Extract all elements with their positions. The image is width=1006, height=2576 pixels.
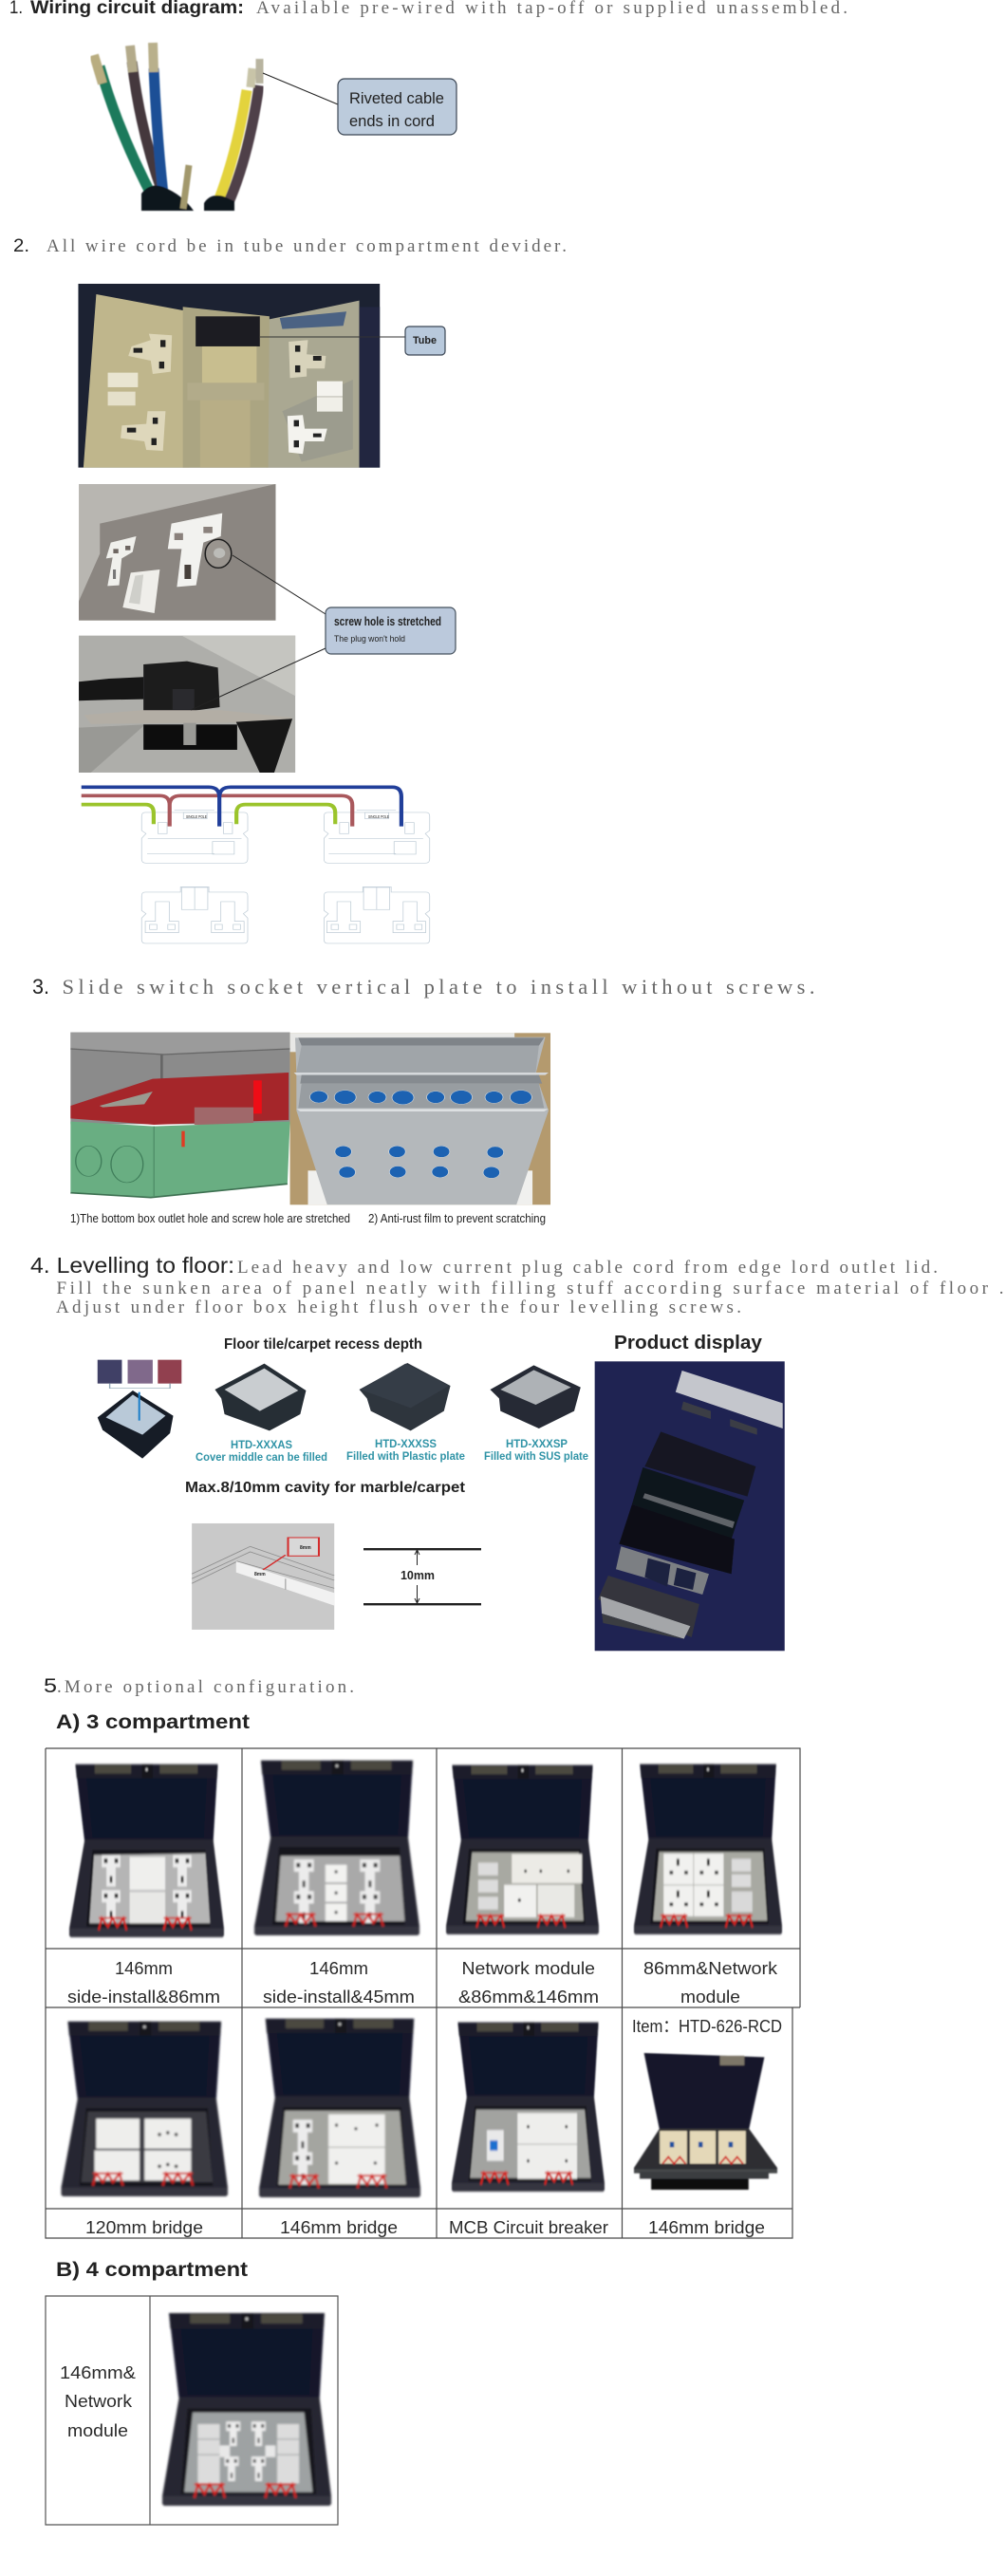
variant labels: HTD-XXXSP bbox=[506, 1437, 568, 1450]
table lines: 3 compartment bbox=[46, 1748, 800, 2238]
callout: screw hole is stretched bbox=[191, 555, 456, 710]
variant labels: Filled with Plastic plate bbox=[346, 1449, 465, 1463]
cell 3: network module, 86mm and 146mm: &86mm&146mm bbox=[458, 1988, 599, 2007]
cell 3: network module, 86mm and 146mm bbox=[446, 1765, 599, 2007]
callout: riveted cable bbox=[263, 73, 456, 135]
cell 8: item HTD-626-RCD: Item：HTD-626-RCD bbox=[632, 2017, 782, 2036]
section 2 heading: All wire cord be in tube under compartment devider. bbox=[47, 236, 567, 256]
callout: riveted cable: Riveted cable bbox=[349, 89, 444, 107]
heading: B 4 compartment: B) 4 compartment bbox=[56, 2259, 248, 2281]
callout: tube bbox=[260, 327, 445, 355]
variant labels: Cover middle can be filled bbox=[196, 1450, 327, 1464]
product exploded view bbox=[595, 1361, 785, 1651]
diagram: cavity corner bbox=[192, 1523, 334, 1630]
variant labels: Filled with SUS plate bbox=[484, 1449, 588, 1463]
cell 5: 120mm bridge bbox=[61, 2022, 228, 2237]
section 3 heading: 3. bbox=[32, 975, 49, 999]
section 3 caption: 2) Anti-rust film to prevent scratching bbox=[368, 1211, 546, 1225]
cell 1: 146mm side-install and 86mm: 146mm bbox=[115, 1959, 173, 1978]
variant labels: HTD-XXXSS bbox=[375, 1437, 437, 1450]
wiring diagram bbox=[82, 787, 430, 943]
variant labels: HTD-XXXAS bbox=[231, 1438, 292, 1451]
section 3 caption: 1)The bottom box outlet hole and screw hole are stretched bbox=[70, 1211, 350, 1225]
section 3 caption bbox=[70, 1211, 546, 1225]
cell 1: 146mm side-install and 86mm: side-install&86mm bbox=[67, 1988, 220, 2007]
section 4 heading and text bbox=[30, 1253, 1004, 1317]
cell 7: MCB circuit breaker: MCB Circuit breaker bbox=[449, 2218, 608, 2237]
floor material swatches and box bbox=[98, 1360, 181, 1459]
photo: stretched screw hole bbox=[79, 484, 275, 621]
diagram: 10mm dimension bbox=[363, 1548, 481, 1605]
cell 3: network module, 86mm and 146mm: Network module bbox=[461, 1959, 595, 1978]
section 4 heading and text: Fill the sunken area of panel neatly with filling stuff according surface material of floor . bbox=[57, 1279, 1004, 1298]
cell 8: item HTD-626-RCD bbox=[632, 2017, 782, 2237]
diagram: cavity corner: 8mm bbox=[300, 1545, 311, 1551]
heading: product display: Product display bbox=[614, 1333, 763, 1353]
cell 2: 146mm side-install and 45mm: side-install&45mm bbox=[263, 1988, 415, 2007]
section 5 heading: .More optional configuration. bbox=[57, 1677, 354, 1697]
section 2 heading: 2. bbox=[13, 236, 29, 256]
section 5 heading: 5 bbox=[44, 1675, 57, 1697]
cell 4: 86mm and network module bbox=[634, 1764, 782, 2007]
table: 4 compartment: module bbox=[67, 2421, 128, 2440]
cell 5: 120mm bridge: 120mm bridge bbox=[85, 2218, 203, 2237]
table: 4 compartment bbox=[46, 2296, 338, 2525]
table: 4 compartment: 146mm& bbox=[60, 2363, 136, 2382]
image: bottom box render bbox=[70, 1033, 290, 1198]
heading: cavity: Max.8/10mm cavity for marble/carpet bbox=[185, 1480, 465, 1496]
photo: riveted wires bbox=[94, 43, 260, 211]
photo: anti-rust steel box bbox=[290, 1033, 550, 1204]
variant labels bbox=[196, 1437, 588, 1464]
callout: riveted cable: ends in cord bbox=[349, 112, 435, 130]
callout: screw hole is stretched: The plug won't hold bbox=[334, 634, 405, 644]
wiring diagram labels: SINGLE POLE bbox=[186, 814, 207, 819]
wiring diagram labels: SINGLE POLE bbox=[368, 814, 389, 819]
section 4 heading and text: Lead heavy and low current plug cable cord from edge lord outlet lid. bbox=[237, 1258, 938, 1278]
wiring diagram labels bbox=[186, 814, 389, 819]
section 3 heading: Slide switch socket vertical plate to install without screws. bbox=[63, 975, 815, 999]
table: 4 compartment: Network bbox=[65, 2392, 133, 2411]
callout: screw hole is stretched: screw hole is stretched bbox=[334, 615, 441, 628]
cell 8: item HTD-626-RCD: 146mm bridge bbox=[648, 2218, 765, 2237]
section 4 heading and text: 4. Levelling to floor: bbox=[30, 1253, 234, 1278]
cell 4: 86mm and network module: module bbox=[680, 1988, 740, 2007]
callout: tube: Tube bbox=[413, 335, 437, 346]
cell 4: 86mm and network module: 86mm&Network bbox=[643, 1959, 778, 1978]
cell 7: MCB circuit breaker bbox=[449, 2023, 608, 2237]
photo: plug held in socket bbox=[79, 636, 295, 773]
cell 1: 146mm side-install and 86mm bbox=[67, 1764, 224, 2007]
diagram: 10mm dimension: 10mm bbox=[401, 1568, 435, 1582]
diagram: cavity corner: 8mm bbox=[254, 1572, 266, 1577]
cell 2: 146mm side-install and 45mm bbox=[254, 1761, 419, 2007]
heading: recess depth: Floor tile/carpet recess depth bbox=[224, 1336, 422, 1353]
cell 2: 146mm side-install and 45mm: 146mm bbox=[309, 1959, 368, 1978]
section 4 heading and text: Adjust under floor box height flush over the four levelling screws. bbox=[56, 1297, 741, 1317]
cell 6: 146mm bridge bbox=[259, 2019, 420, 2237]
cell 6: 146mm bridge: 146mm bridge bbox=[280, 2218, 398, 2237]
photo: tube under divider bbox=[78, 284, 380, 468]
product variants bbox=[214, 1363, 581, 1430]
heading: A 3 compartment: A) 3 compartment bbox=[56, 1711, 250, 1733]
